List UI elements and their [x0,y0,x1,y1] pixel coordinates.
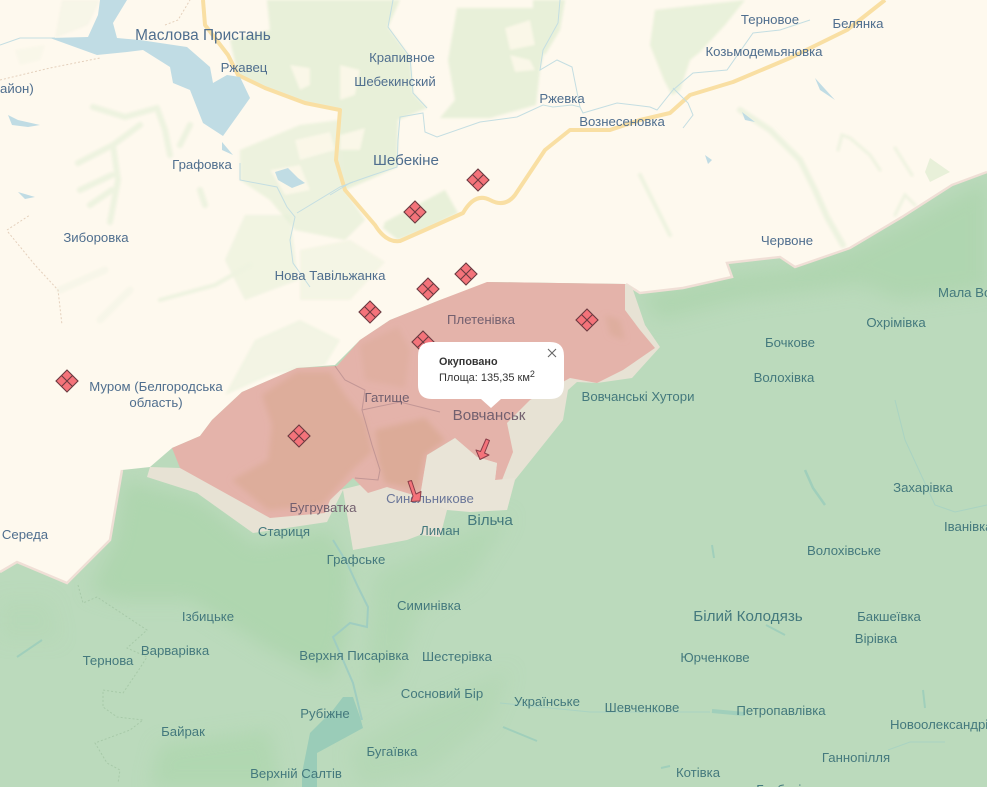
Ukrainian rivers and reservoir [17,400,987,787]
dotted district lines [0,0,190,325]
labels: Ukrainian side: Вовчанські Хутори [582,389,694,404]
labels: occupied and grey zone: Синельникове [386,491,474,506]
forests in Ukraine [98,192,984,782]
occupied area [172,282,655,518]
icon: fortification markers [56,169,598,447]
popup title: Окуповано [439,356,498,368]
labels: occupied and grey zone: Вільча [467,512,513,529]
light fields inside forests [270,20,535,195]
labels: Russian side: Козьмодемьяновка [705,44,823,59]
labels: occupied and grey zone: Вовчанськ [453,407,526,424]
labels: occupied and grey zone: Плетенівка [447,312,516,327]
labels: occupied and grey zone: Лиман [420,523,460,538]
labels: Ukrainian side: Сосновий Бір [401,686,483,701]
labels: Russian side: Шебекіне [373,152,439,169]
labels: Ukrainian side: Байрак [161,724,205,739]
forests north of border [15,0,745,395]
labels: Russian side: Муром (Белгородська [89,379,223,394]
grey zone: contested buffer [147,284,660,550]
labels: Russian side: область) [129,395,183,410]
labels: Russian side: Середа [2,527,49,542]
labels: Ukrainian side: Котівка [676,765,721,780]
road [203,0,885,241]
labels: Ukrainian side: Верхня Писарівка [299,648,409,663]
labels: Ukrainian side: Рубіжне [300,706,350,721]
labels: Ukrainian side [83,285,987,787]
labels: Russian side [0,12,884,542]
labels: Russian side: Нова Тавільжанка [275,268,386,283]
labels: Ukrainian side: Юрченкове [680,650,750,665]
labels: Ukrainian side: Шестерівка [422,649,493,664]
Ukraine territory [0,172,987,787]
labels: Ukrainian side: Шевченкове [605,700,679,715]
labels: Ukrainian side: Вірівка [855,631,898,646]
rivers [0,0,810,287]
labels: Russian side: Ржавец [221,60,268,75]
labels: Ukrainian side: Симинівка [397,598,462,613]
popup: occupied area [418,342,564,408]
labels: Russian side: Ржевка [539,91,585,106]
border edge strip [0,172,987,583]
labels: Russian side: Крапивное [369,50,435,65]
labels: Ukrainian side: Волохівка [754,370,815,385]
labels: occupied and grey zone [258,312,526,539]
labels: Ukrainian side: Бугаївка [367,744,418,759]
popup area value: Площа: 135,35 км [439,372,530,384]
labels: Ukrainian side: Графське [327,552,385,567]
labels: Ukrainian side: Охрімівка [866,315,926,330]
labels: Ukrainian side: Ізбицьке [182,609,234,624]
labels: Ukrainian side: Білий Колодязь [693,608,803,625]
labels: occupied and grey zone: Стариця [258,524,310,539]
labels: Russian side: Маслова Пристань [135,27,271,44]
icon: close [548,349,556,357]
labels: Russian side: Графовка [172,157,232,172]
dotted oblast line in Ukraine [78,585,147,783]
inner light area at Vilcha [420,438,515,512]
labels: Ukrainian side: Бочкове [765,335,815,350]
icon: attack arrows [408,439,490,502]
labels: Russian side: Вознесеновка [579,114,665,129]
labels: Ukrainian side: Ганнопілля [822,750,890,765]
small forest patch [925,158,950,182]
labels: Ukrainian side: Верхній Салтів [250,766,342,781]
labels: Russian side: Шебекинский [354,74,436,89]
labels: Ukrainian side: Захарівка [893,480,954,495]
labels: Russian side: Червоне [761,233,813,248]
labels: Russian side: Белянка [832,16,884,31]
labels: occupied and grey zone: Гатище [365,390,409,405]
labels: Ukrainian side: Українське [514,694,580,709]
labels: occupied and grey zone: Бугруватка [290,500,357,515]
labels: Ukrainian side: Тернова [83,653,134,668]
labels: Russian side: айон) [0,81,34,96]
labels: Ukrainian side: Волохівське [807,543,881,558]
dendritic gullies [60,107,915,320]
labels: Russian side: Зиборовка [63,230,129,245]
labels: Ukrainian side: Варварівка [141,643,210,658]
labels: Russian side: Терновое [741,12,799,27]
reservoir [8,0,835,199]
popup area value: 2 [530,369,535,379]
labels: Ukrainian side: Петропавлівка [736,703,826,718]
labels: Ukrainian side: Бакшеївка [857,609,922,624]
river through occupied area [335,366,440,480]
darker patches inside occupied area [232,315,625,510]
